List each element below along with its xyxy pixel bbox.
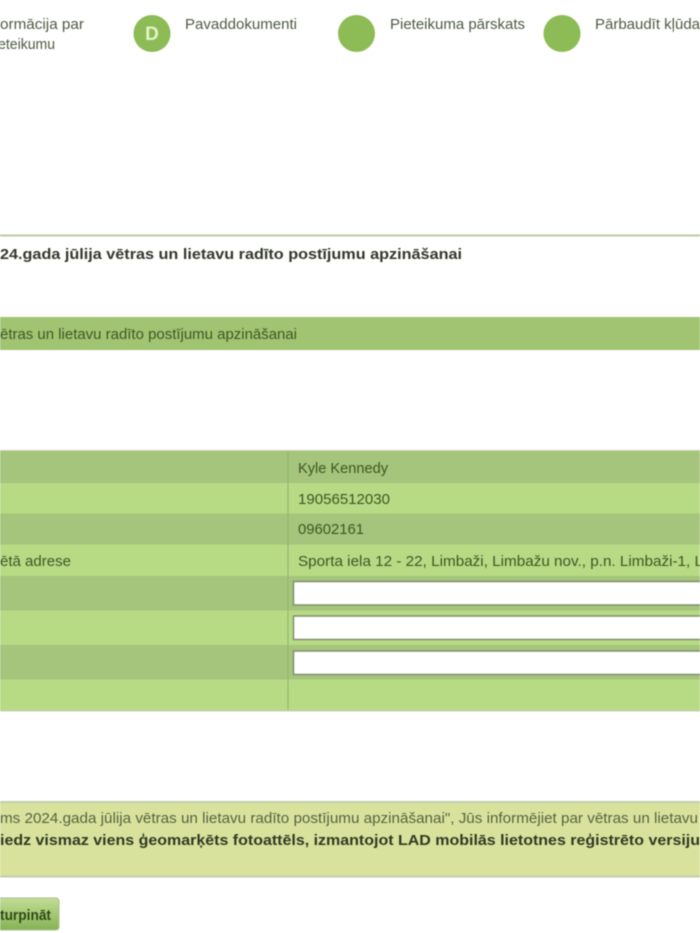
- step label: application information: [0, 16, 84, 53]
- step circle: D: D: [145, 24, 159, 45]
- row: client number: 09602161: [298, 521, 364, 538]
- row: personal code: 19056512030: [298, 491, 390, 508]
- row: input field 2: [0, 610, 700, 645]
- continue button: turpināt: [0, 907, 51, 924]
- row: input field 1: [0, 576, 700, 610]
- step label: application overview: Pieteikuma pārskats: [390, 16, 525, 33]
- row: empty: [0, 680, 700, 710]
- row: name: [0, 451, 700, 483]
- row: declared address: Sporta iela 12 - 22, Limbaži, Limbažu nov., p.n. Limbaži-1, L: [298, 553, 700, 570]
- section header band: [0, 317, 700, 350]
- page heading: 24.gada jūlija vētras un lietavu radīto postījumu apzināšanai: [0, 246, 462, 263]
- row: declared address: ētā adrese: [0, 553, 71, 570]
- section header band: ētras un lietavu radīto postījumu apzināšanai: [0, 326, 297, 343]
- continue button: [0, 898, 59, 930]
- step label: check errors: Pārbaudīt kļūda: [595, 16, 700, 33]
- notice text: ms 2024.gada jūlija vētras un lietavu radīto postījumu apzināšanai", Jūs informējiet par vētras un lietavu: [0, 810, 698, 827]
- notice bold text: iedz vismaz viens ģeomarķēts fotoattēls, izmantojot LAD mobilās lietotnes reģistrēto versiju: [0, 832, 700, 849]
- row: name: Kyle Kennedy: [298, 460, 388, 477]
- step circle: overview: [338, 15, 375, 52]
- step circle: check errors: [544, 15, 580, 52]
- data table: [0, 450, 700, 712]
- step label: application information: ormācija par: [0, 16, 84, 33]
- row: personal code: [0, 483, 700, 514]
- step label: supporting documents: Pavaddokumenti: [185, 16, 297, 33]
- row: input field 3: [0, 645, 700, 680]
- step circle: D: [134, 15, 170, 52]
- notice box: [0, 801, 700, 878]
- row: client number: [0, 514, 700, 544]
- step indicator: [0, 15, 700, 53]
- row: declared address: [0, 544, 700, 576]
